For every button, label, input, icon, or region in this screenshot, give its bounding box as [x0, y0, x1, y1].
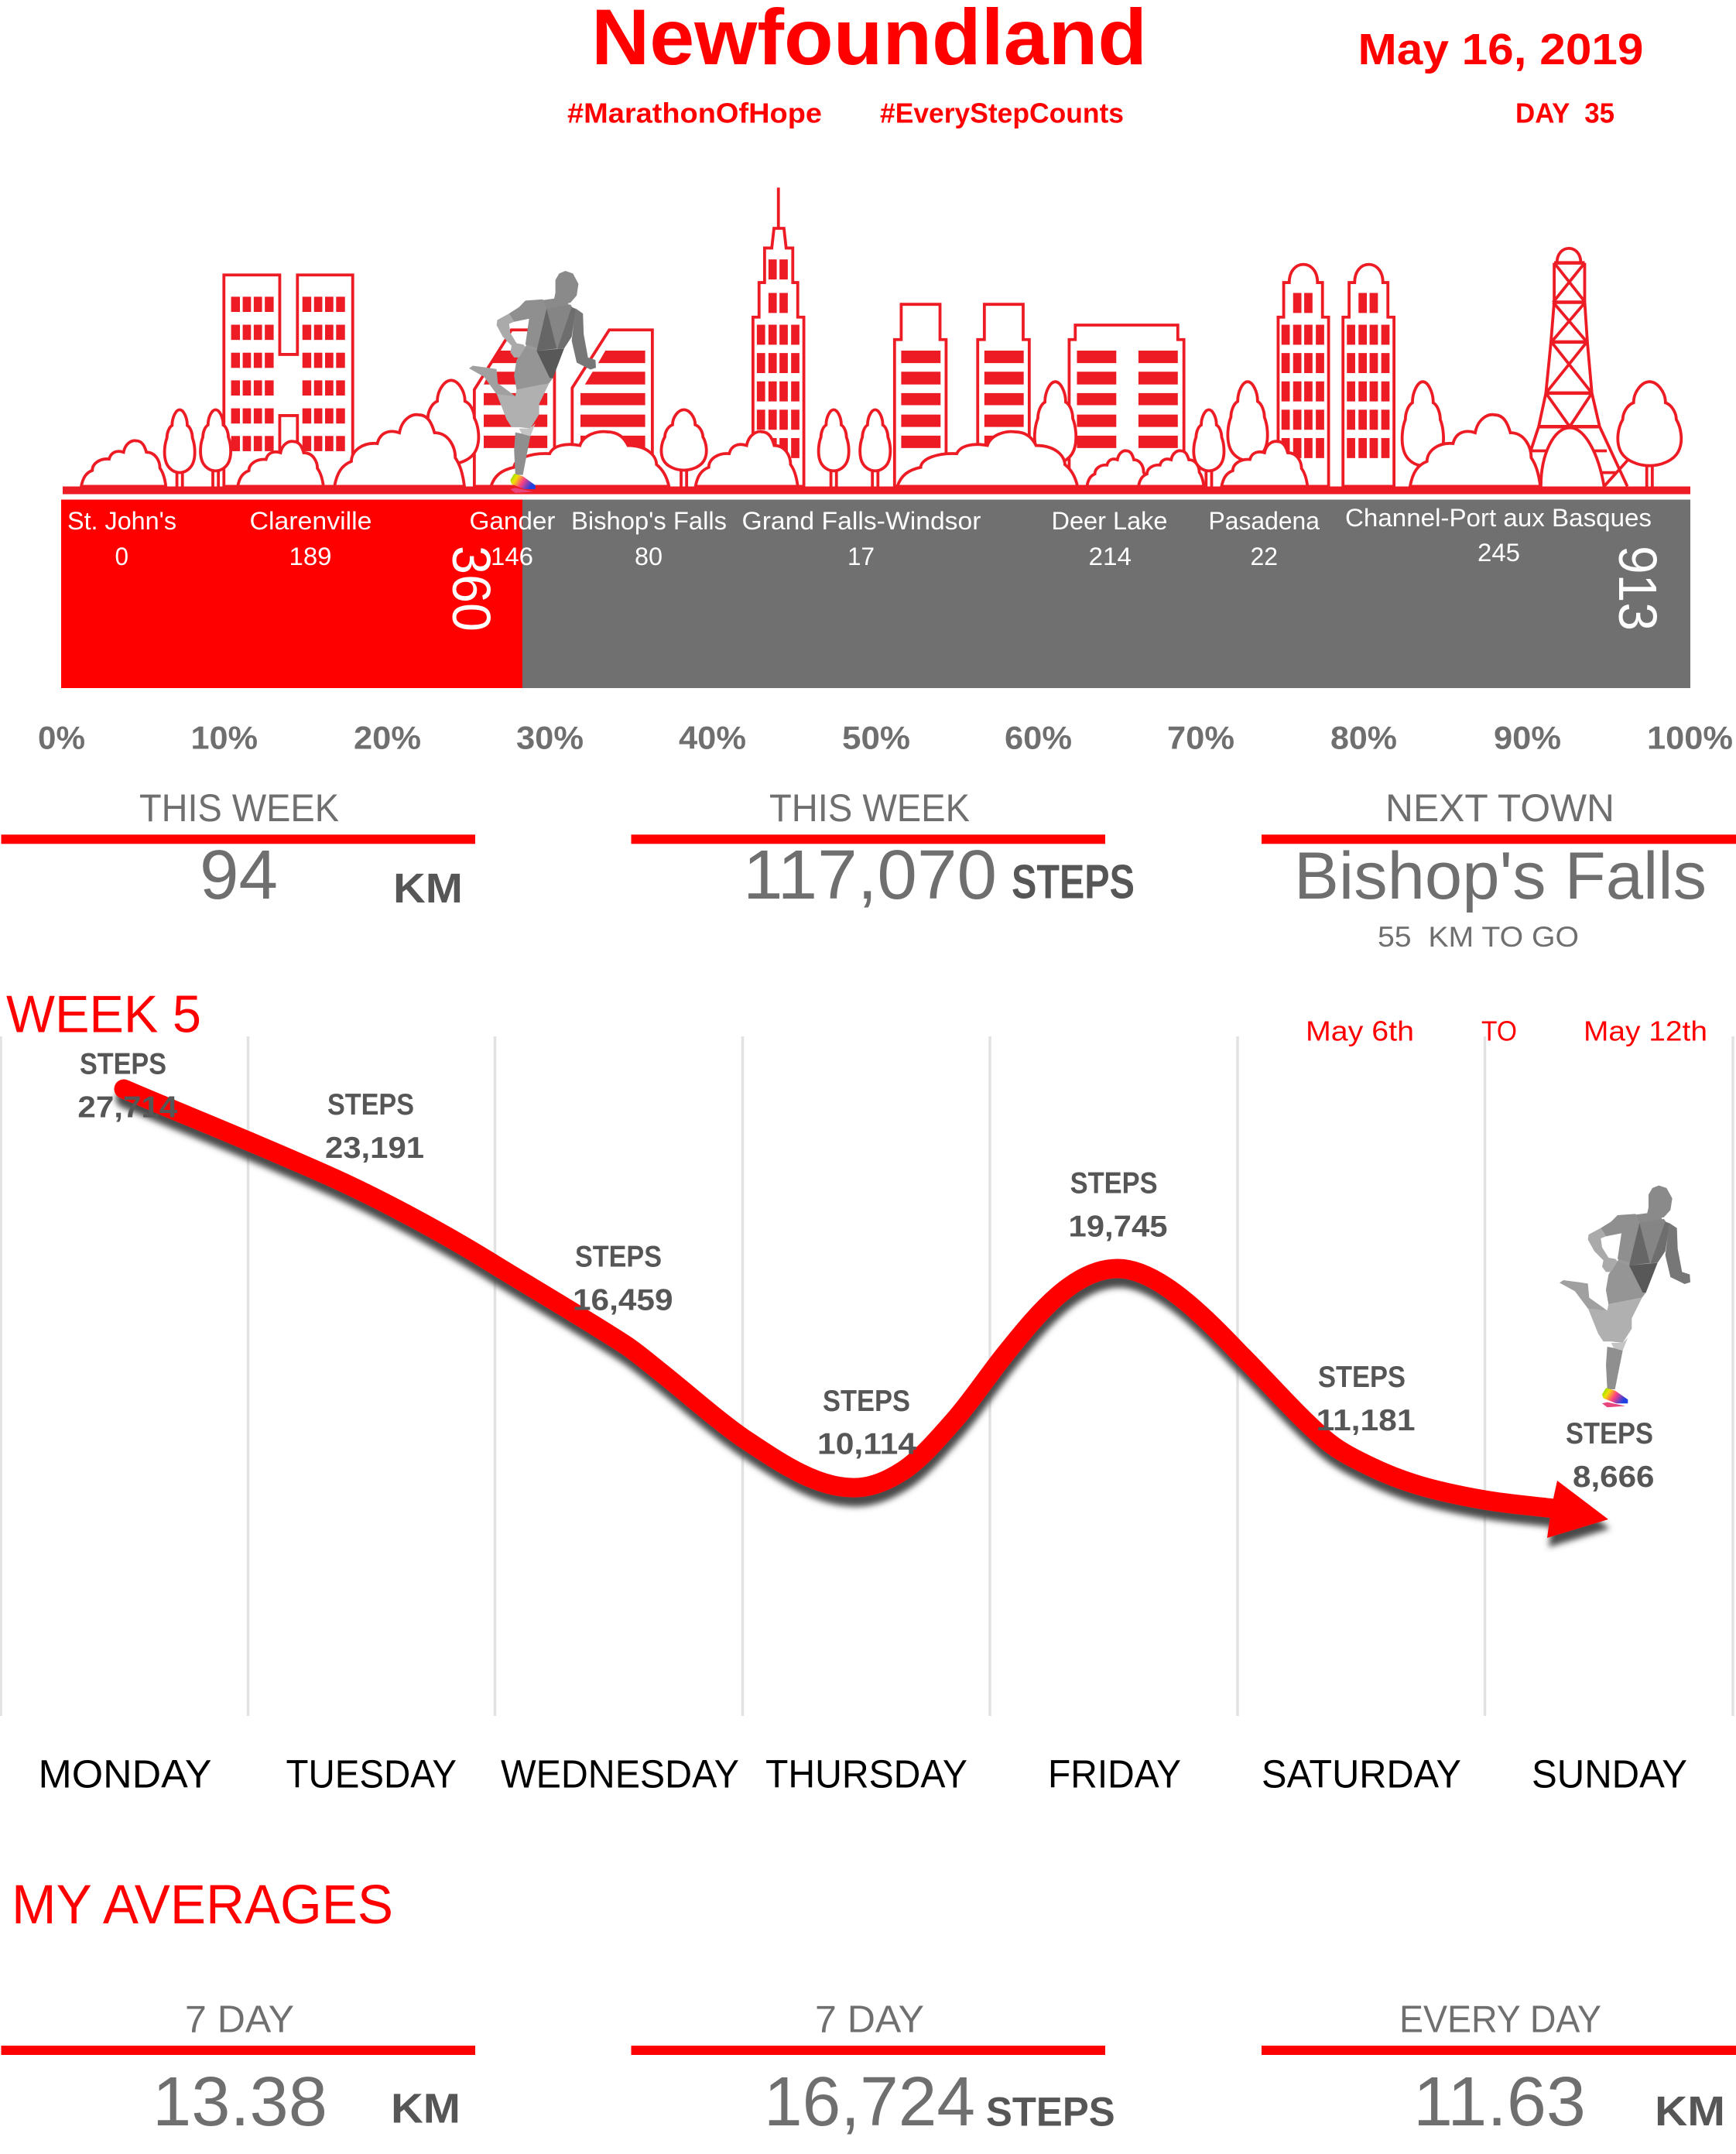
- step labels: [77, 1048, 1654, 1494]
- step labels: STEPS: [1566, 1417, 1653, 1450]
- weekday labels: MONDAY: [39, 1752, 212, 1796]
- stat: 7 day steps: 16,724: [764, 2063, 975, 2141]
- weekday labels: TUESDAY: [286, 1752, 457, 1796]
- completed distance: [61, 500, 522, 688]
- stat: weekly kilometres: KM: [393, 865, 463, 912]
- weekday labels: THURSDAY: [765, 1752, 967, 1796]
- stat: every day kilometres: KM: [1655, 2088, 1725, 2135]
- stat: next town: Bishop's Falls: [1294, 839, 1707, 913]
- runner on chart: [1560, 1186, 1690, 1407]
- step labels: 23,191: [325, 1132, 424, 1165]
- step labels: STEPS: [575, 1240, 662, 1274]
- town distances: [115, 539, 1520, 570]
- weekday labels: SUNDAY: [1532, 1752, 1687, 1796]
- stat: weekly kilometres: 94: [200, 837, 278, 914]
- stat: 7 day kilometres: 13.38: [152, 2063, 327, 2141]
- town labels: Channel-Port aux Basques: [1345, 504, 1652, 532]
- trend arrow: [124, 1089, 1608, 1538]
- road line: [63, 486, 1690, 494]
- weekday labels: [39, 1752, 1687, 1796]
- stat: next town: [1262, 786, 1736, 953]
- stat: 7 day kilometres: [2, 1998, 475, 2141]
- percent axis: 20%: [354, 720, 421, 755]
- step labels: STEPS: [823, 1385, 910, 1418]
- stat: weekly steps: 117,070: [743, 837, 997, 914]
- skyline west half: [81, 187, 849, 486]
- town distances: 22: [1251, 543, 1278, 570]
- domed tower 2: [1343, 265, 1394, 486]
- percent axis: [38, 720, 1733, 755]
- step labels: 11,181: [1317, 1404, 1416, 1437]
- step labels: STEPS: [327, 1088, 414, 1122]
- town distances: 17: [847, 543, 875, 570]
- step labels: STEPS: [80, 1048, 166, 1080]
- stat: every day kilometres: 11.63: [1413, 2063, 1586, 2141]
- stat: weekly steps: THIS WEEK: [769, 786, 970, 830]
- stat: every day kilometres: EVERY DAY: [1399, 1998, 1601, 2040]
- town labels: [67, 504, 1652, 535]
- week date range: May 12th: [1584, 1015, 1707, 1046]
- percent axis: 60%: [1005, 720, 1072, 755]
- stat: weekly kilometres: THIS WEEK: [139, 786, 339, 830]
- weekly heading: WEEK 5: [6, 985, 201, 1043]
- week date range: [1306, 1015, 1707, 1046]
- stat: 7 day kilometres: KM: [391, 2086, 461, 2132]
- stat: every day kilometres: [1262, 1998, 1736, 2141]
- step labels: STEPS: [1318, 1361, 1406, 1394]
- trees and bushes east: [860, 382, 1681, 486]
- week date range: TO: [1481, 1015, 1517, 1046]
- town distances: 80: [635, 543, 663, 570]
- town labels: Bishop's Falls: [571, 507, 727, 535]
- averages heading: MY AVERAGES: [12, 1875, 393, 1936]
- hashtag: every step counts: #EveryStepCounts: [880, 98, 1124, 128]
- percent axis: 30%: [516, 720, 584, 755]
- town distances: 146: [491, 543, 533, 570]
- stat: next town: NEXT TOWN: [1385, 786, 1614, 830]
- step labels: 27,714: [77, 1091, 178, 1124]
- town distances: 214: [1088, 543, 1132, 570]
- skyline east half: [860, 248, 1681, 486]
- daily steps line chart: [1, 1036, 1733, 1716]
- town labels: Clarenville: [249, 507, 372, 535]
- domed tower 1: [1278, 265, 1329, 486]
- weekday labels: SATURDAY: [1262, 1752, 1461, 1796]
- percent axis: 70%: [1167, 720, 1234, 755]
- stat: 7 day steps: STEPS: [986, 2090, 1115, 2135]
- runner on skyline: [469, 271, 596, 493]
- step labels: STEPS: [1070, 1167, 1158, 1200]
- stat: 7 day steps: 7 DAY: [815, 1998, 924, 2040]
- day grid lines: [1, 1036, 1733, 1716]
- step labels: 10,114: [817, 1427, 917, 1461]
- date: May 16, 2019: [1358, 25, 1644, 74]
- hashtag: marathon of hope: #MarathonOfHope: [567, 98, 822, 128]
- percent axis: 50%: [842, 720, 910, 755]
- day counter: DAY 35: [1515, 98, 1614, 128]
- percent axis: 10%: [190, 720, 258, 755]
- slanted building behind runner: [474, 330, 554, 486]
- apartment building: [224, 275, 353, 486]
- percent axis: 90%: [1494, 720, 1561, 755]
- step labels: 16,459: [573, 1283, 673, 1317]
- stat: 7 day kilometres: 7 DAY: [185, 1998, 294, 2040]
- percent axis: 40%: [679, 720, 746, 755]
- stepped building 1: [895, 304, 946, 486]
- kilometres completed: 360: [441, 546, 502, 632]
- town labels: Gander: [469, 507, 556, 535]
- stat: weekly steps: STEPS: [1012, 856, 1135, 909]
- week date range: May 6th: [1306, 1015, 1414, 1046]
- town labels: Grand Falls-Windsor: [741, 507, 981, 535]
- stepped building 2: [978, 304, 1029, 486]
- stat: 7 day steps: [632, 1998, 1115, 2141]
- weekday labels: FRIDAY: [1048, 1752, 1181, 1796]
- percent axis: 80%: [1330, 720, 1397, 755]
- stat: next town: 55 KM TO GO: [1378, 921, 1579, 953]
- step labels: 8,666: [1573, 1461, 1655, 1494]
- town distances: 245: [1477, 539, 1520, 567]
- kilometres total: 913: [1608, 546, 1668, 631]
- town distances: 0: [115, 543, 128, 570]
- town labels: St. John's: [67, 507, 176, 535]
- trees and bushes west: [81, 380, 849, 486]
- percent axis: 100%: [1647, 720, 1733, 755]
- city skyline illustration: [63, 187, 1690, 494]
- stat: weekly steps: [632, 786, 1135, 914]
- step labels: 19,745: [1068, 1211, 1167, 1243]
- town labels: Deer Lake: [1051, 507, 1167, 535]
- town labels: Pasadena: [1209, 507, 1320, 535]
- percent axis: 0%: [38, 720, 85, 755]
- stat: weekly kilometres: [2, 786, 475, 914]
- progress bar: [61, 500, 1690, 688]
- wide stepped building: [1069, 325, 1184, 486]
- weekday labels: WEDNESDAY: [501, 1752, 739, 1796]
- remaining distance: [61, 500, 1690, 688]
- tall spire tower: [753, 187, 804, 486]
- town distances: 189: [289, 543, 331, 570]
- slanted striped building: [572, 330, 652, 486]
- lattice tower: [1529, 248, 1628, 486]
